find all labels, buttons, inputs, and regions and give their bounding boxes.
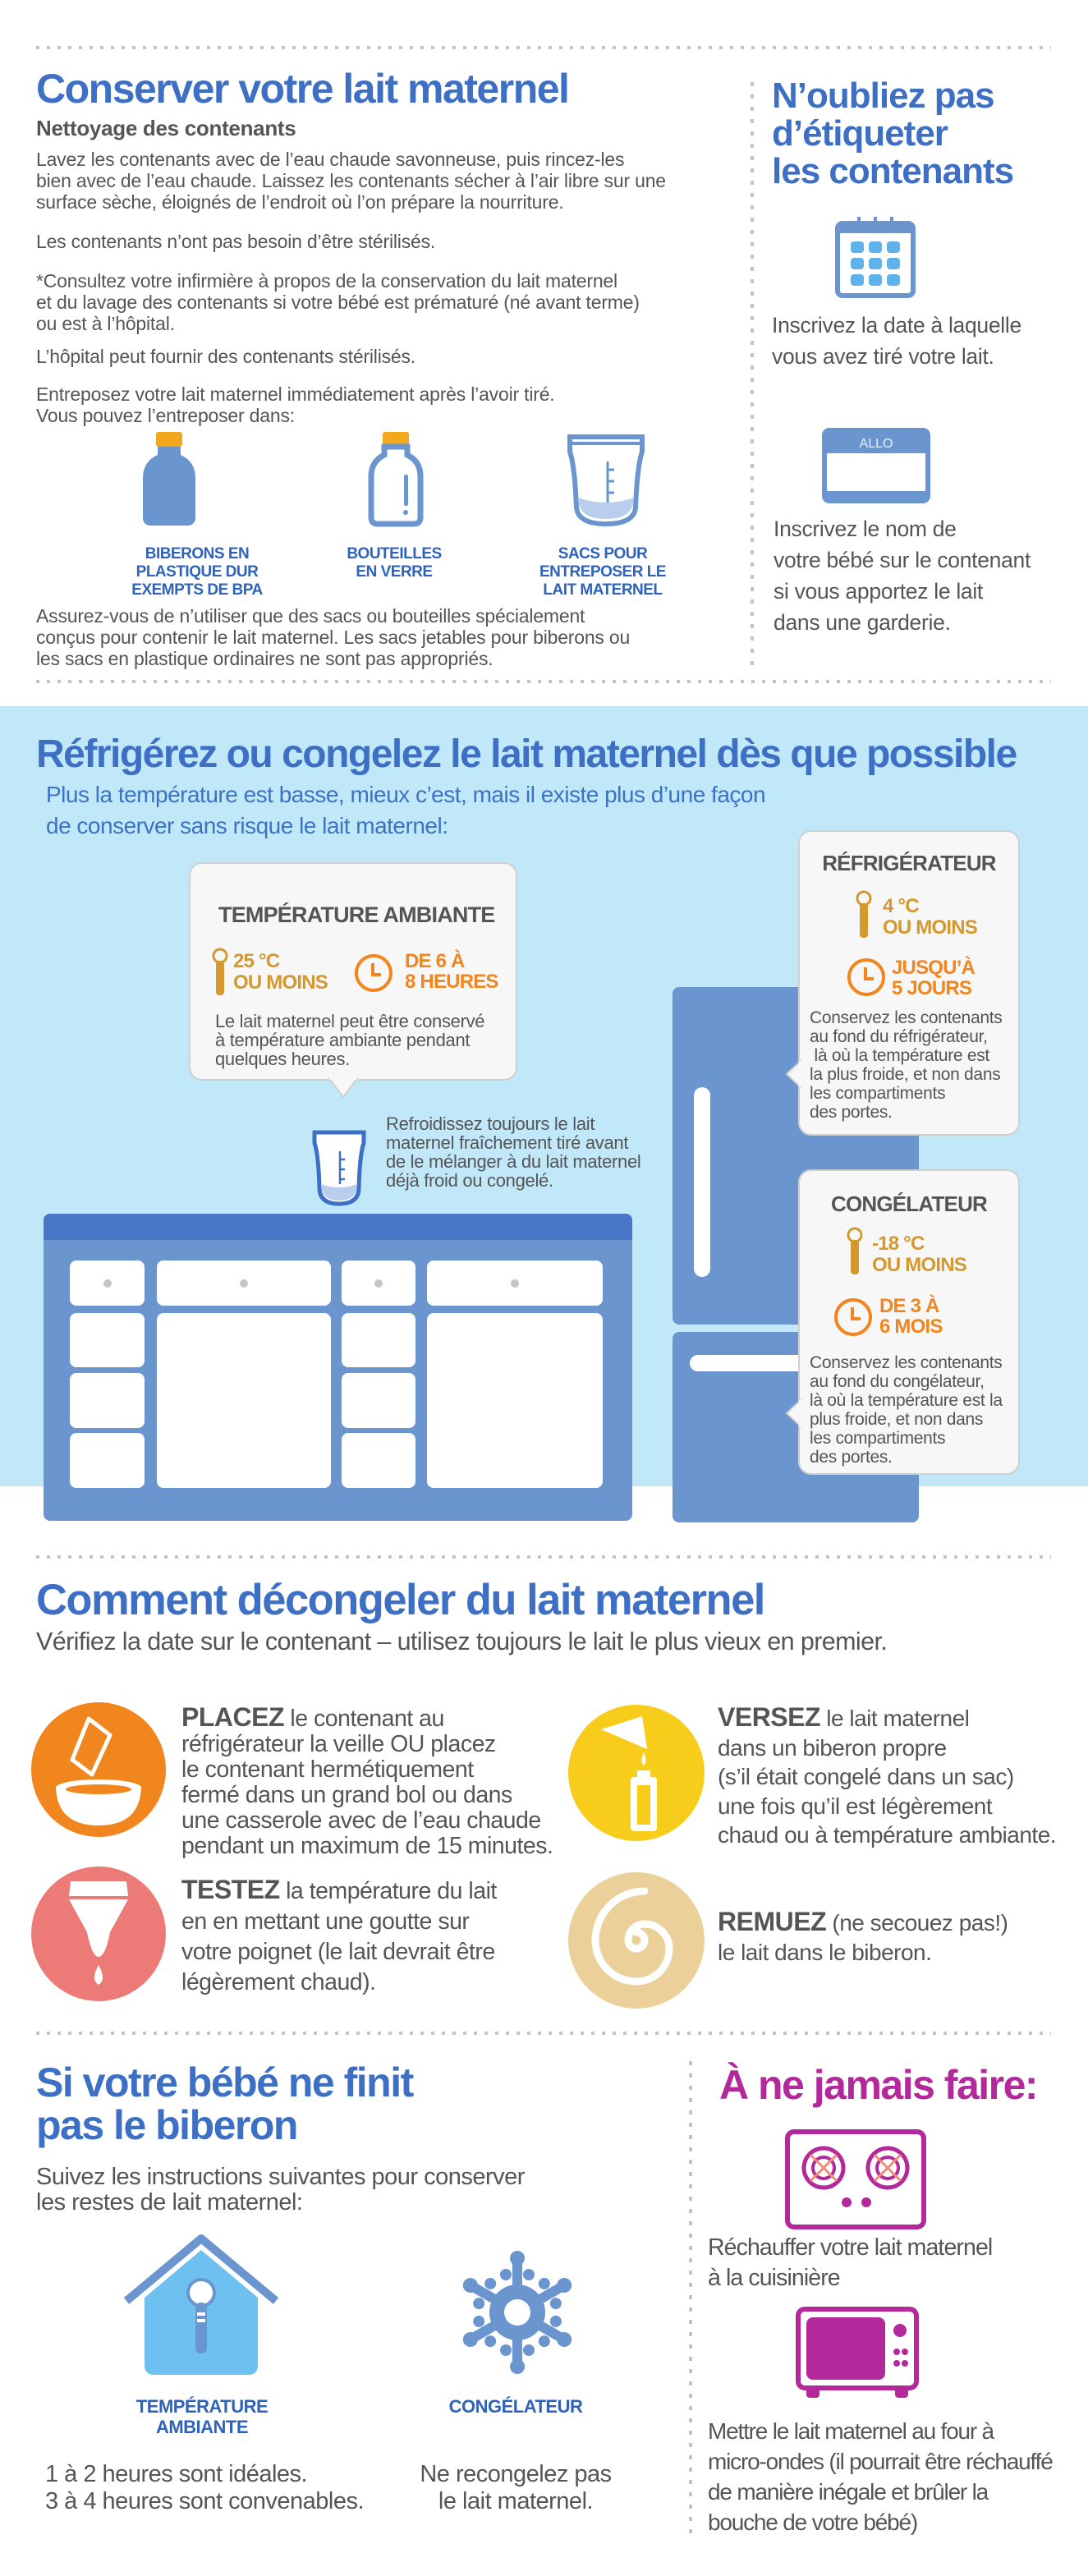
title: never do: À ne jamais faire: <box>719 2062 1037 2108</box>
text: versez: dans un biberon propre <box>718 1734 947 1761</box>
callout: refrigerator: OU MOINS <box>883 916 977 939</box>
text: remuez: le lait dans le biberon. <box>718 1940 931 1965</box>
text: hours: 3 à 4 heures sont convenables. <box>45 2488 364 2514</box>
text: cool before mixing: de le mélanger à du lait maternel <box>386 1151 641 1172</box>
text: no refreeze: le lait maternel. <box>438 2488 593 2514</box>
subtitle: Plus la température est basse, mieux c’est, mais il existe plus d’une façon <box>46 782 765 807</box>
callout: freezer: -18 °C <box>872 1233 925 1255</box>
callout: freezer: CONGÉLATEUR <box>831 1192 987 1216</box>
callout: freezer: OU MOINS <box>872 1254 966 1276</box>
text: placez: pendant un maximum de 15 minutes. <box>181 1833 553 1859</box>
text: hours <box>45 2461 364 2514</box>
text: follow instructions: les restes de lait maternel: <box>36 2189 302 2216</box>
text: nurse note: *Consultez votre infirmière à propos de la conservation du lait maternel <box>36 270 617 292</box>
pointer <box>328 1077 358 1099</box>
text: versez: une fois qu’il est légèrement <box>718 1793 992 1818</box>
text: cool before mixing <box>386 1114 641 1191</box>
text: cool before mixing: Refroidissez toujours le lait <box>386 1114 594 1134</box>
text: name: votre bébé sur le contenant <box>774 548 1031 572</box>
callout: freezer: 6 MOIS <box>879 1316 943 1338</box>
text: testez: TESTEZ la température du lait <box>181 1875 497 1904</box>
label: glass bottles: EN VERRE <box>356 563 433 581</box>
text: microwave: micro-ondes (il pourrait être réchauffé <box>708 2449 1053 2474</box>
subtitle: de conserver sans risque le lait maternel: <box>46 813 448 838</box>
callout: freezer: des portes. <box>810 1448 893 1467</box>
text: stove: à la cuisinière <box>708 2265 840 2291</box>
title: label containers <box>772 76 1013 191</box>
text: date: vous avez tiré votre lait. <box>772 344 994 369</box>
callout: room temperature: DE 6 À <box>405 950 465 972</box>
text: bags warning: conçus pour contenir le lait maternel. Les sacs jetables pour biberons ou <box>36 627 630 648</box>
callout: freezer: DE 3 À <box>879 1295 939 1317</box>
icon: thermometer <box>212 948 228 995</box>
title: label containers: d’étiqueter <box>772 113 948 154</box>
text: placez: une casserole avec de l’eau chaude <box>181 1807 541 1834</box>
subtitle <box>46 782 765 838</box>
icon: pink drop test <box>31 1867 166 2001</box>
callout: freezer: là où la température est la <box>810 1391 1003 1410</box>
label: plastic bottles: PLASTIQUE DUR <box>136 563 258 581</box>
text: not sterilized: Les contenants n’ont pas besoin d’être stérilisés. <box>36 231 435 252</box>
callout: room temperature <box>189 862 517 1081</box>
text: bags warning: les sacs en plastique ordinaires ne sont pas appropriés. <box>36 648 493 669</box>
label: room temp: TEMPÉRATURE <box>136 2396 268 2417</box>
icon: plastic bottle <box>143 432 195 526</box>
callout: refrigerator: Conservez les contenants <box>810 1008 1002 1027</box>
title: refrigerate: Réfrigérez ou congelez le lait maternel dès que possible <box>36 732 1017 776</box>
text: microwave: bouche de votre bébé) <box>708 2509 917 2535</box>
text: store: Entreposez votre lait maternel immédiatement après l’avoir tiré. <box>36 383 554 405</box>
callout: refrigerator: RÉFRIGÉRATEUR <box>822 851 996 875</box>
title: label containers: les contenants <box>772 151 1013 191</box>
text: placez <box>181 1702 553 1859</box>
icon: calendar <box>835 217 916 298</box>
label: glass bottles <box>347 545 442 581</box>
text: name: si vous apportez le lait <box>774 579 983 604</box>
text: versez: VERSEZ le lait maternel <box>718 1702 969 1732</box>
callout: freezer: Conservez les contenants <box>810 1353 1002 1372</box>
text: nurse note: ou est à l’hôpital. <box>36 313 175 334</box>
text: placez: PLACEZ le contenant au <box>181 1702 444 1732</box>
text: versez: (s’il était congelé dans un sac) <box>718 1764 1014 1789</box>
text block: cleaning instructions: bien avec de l’eau chaude. Laissez les contenants sécher à l’air libre sur une <box>36 170 666 191</box>
title: leftover: pas le biberon <box>36 2102 297 2148</box>
label: glass bottles: BOUTEILLES <box>347 545 442 562</box>
icon: yellow pour <box>568 1705 705 1841</box>
icon: microwave <box>796 2307 919 2398</box>
callout: refrigerator <box>798 830 1020 1136</box>
illustration: fridge <box>673 987 919 1522</box>
text: remuez: REMUEZ (ne secouez pas!) <box>718 1907 1008 1936</box>
text: name <box>774 517 1031 635</box>
callout: room temperature: 25 °C <box>233 950 279 972</box>
callout: refrigerator: la plus froide, et non dans <box>810 1065 1000 1084</box>
callout: refrigerator: 4 °C <box>883 895 919 917</box>
text: placez: fermé dans un grand bol ou dans <box>181 1782 512 1808</box>
text: versez <box>718 1702 1056 1848</box>
callout: refrigerator: là où la température est <box>815 1046 989 1065</box>
label: plastic bottles: BIBERONS EN <box>145 545 249 562</box>
label: room temp: AMBIANTE <box>156 2417 248 2437</box>
text: nurse note <box>36 270 640 334</box>
icon: stove <box>785 2129 926 2229</box>
text: microwave <box>708 2416 1053 2537</box>
callout: room temperature: Le lait maternel peut être conservé <box>215 1011 484 1031</box>
title: leftover: Si votre bébé ne finit <box>36 2059 413 2105</box>
callout: room temperature: TEMPÉRATURE AMBIANTE <box>218 902 494 927</box>
label: bags: LAIT MATERNEL <box>543 581 663 599</box>
title: leftover <box>36 2059 414 2148</box>
text: microwave: de manière inégale et brûler la <box>708 2479 988 2505</box>
text: name: Inscrivez le nom de <box>774 517 957 541</box>
callout: refrigerator: JUSQU’À <box>892 957 975 979</box>
title: conserver: Conserver votre lait maternel <box>36 66 568 112</box>
text: testez <box>181 1875 498 1995</box>
text: no refreeze: Ne recongelez pas <box>420 2461 612 2487</box>
icon: orange bowl <box>31 1702 166 1837</box>
text: nurse note: et du lavage des contenants si votre bébé est prématuré (né avant terme) <box>36 292 640 313</box>
text: testez: légèrement chaud). <box>181 1969 376 1995</box>
callout: room temperature: 8 HEURES <box>405 971 498 993</box>
callout: refrigerator: au fond du réfrigérateur, <box>810 1027 988 1046</box>
text: testez: en en mettant une goutte sur <box>181 1908 469 1935</box>
panel: refrigerate or freeze <box>0 706 1088 1486</box>
text: name: dans une garderie. <box>774 610 951 635</box>
text: stove <box>708 2234 992 2291</box>
text: hospital: L’hôpital peut fournir des contenants stérilisés. <box>36 346 415 367</box>
text: versez: chaud ou à température ambiante. <box>718 1822 1056 1848</box>
label: room temp <box>136 2396 268 2437</box>
callout: freezer <box>798 1169 1020 1475</box>
callout: room temperature: à température ambiante pendant <box>215 1030 470 1050</box>
text: store <box>36 383 554 426</box>
text: follow instructions <box>36 2164 525 2216</box>
text: testez: votre poignet (le lait devrait être <box>181 1939 495 1965</box>
illustration: counter <box>44 1214 632 1521</box>
text: bags warning: Assurez-vous de n’utiliser que des sacs ou bouteilles spécialement <box>36 605 585 627</box>
callout: room temperature: OU MOINS <box>233 971 328 994</box>
icon: snowflake <box>463 2251 572 2374</box>
icon: name tag: ALLO <box>860 437 893 451</box>
label: plastic bottles <box>131 545 263 599</box>
text: bags warning <box>36 605 630 669</box>
icon: glass bottle <box>368 432 424 527</box>
label: plastic bottles: EXEMPTS DE BPA <box>131 581 263 599</box>
label: freezer: CONGÉLATEUR <box>449 2396 582 2417</box>
text: store: Vous pouvez l’entreposer dans: <box>36 405 295 426</box>
text: no refreeze <box>420 2461 612 2514</box>
text block: cleaning instructions: surface sèche, éloignés de l’endroit où l’on prépare la nourriture. <box>36 191 563 213</box>
callout: freezer: au fond du congélateur, <box>810 1372 985 1391</box>
text: date: Inscrivez la date à laquelle <box>772 313 1021 337</box>
text: date <box>772 313 1021 369</box>
subheading: nettoyage: Nettoyage des contenants <box>36 116 296 140</box>
icon: name tag <box>822 428 930 503</box>
label: bags <box>539 545 666 599</box>
callout: freezer: les compartiments <box>810 1429 945 1448</box>
text: hours: 1 à 2 heures sont idéales. <box>45 2461 307 2487</box>
icon: clock <box>355 954 393 992</box>
subtitle: check date: Vérifiez la date sur le contenant – utilisez toujours le lait le plus vieux en premier. <box>36 1628 887 1655</box>
text block: cleaning instructions: Lavez les contenants avec de l’eau chaude savonneuse, puis rincez-les <box>36 149 624 170</box>
icon: small bag <box>312 1130 366 1205</box>
text: cool before mixing: maternel fraîchement tiré avant <box>386 1132 628 1153</box>
text block: cleaning instructions <box>36 149 666 213</box>
text: remuez <box>718 1907 1008 1965</box>
text: microwave: Mettre le lait maternel au four à <box>708 2418 994 2444</box>
title: label containers: N’oubliez pas <box>772 76 994 116</box>
text: placez: le contenant hermétiquement <box>181 1756 474 1783</box>
icon: house <box>123 2234 279 2375</box>
icon: storage bag <box>567 434 645 526</box>
callout: refrigerator: des portes. <box>810 1103 893 1122</box>
icon: beige swirl <box>568 1872 705 2009</box>
text: follow instructions: Suivez les instructions suivantes pour conserver <box>36 2164 525 2190</box>
callout: room temperature: quelques heures. <box>215 1049 350 1069</box>
title: thawing: Comment décongeler du lait maternel <box>36 1576 764 1624</box>
label: bags: SACS POUR <box>558 545 647 562</box>
callout: freezer: plus froide, et non dans <box>810 1410 983 1429</box>
text: cool before mixing: déjà froid ou congelé. <box>386 1170 553 1191</box>
callout: refrigerator: les compartiments <box>810 1084 945 1103</box>
text: stove: Réchauffer votre lait maternel <box>708 2234 992 2261</box>
callout: refrigerator: 5 JOURS <box>892 977 971 999</box>
label: bags: ENTREPOSER LE <box>539 563 666 581</box>
text: placez: réfrigérateur la veille OU placez <box>181 1731 496 1757</box>
